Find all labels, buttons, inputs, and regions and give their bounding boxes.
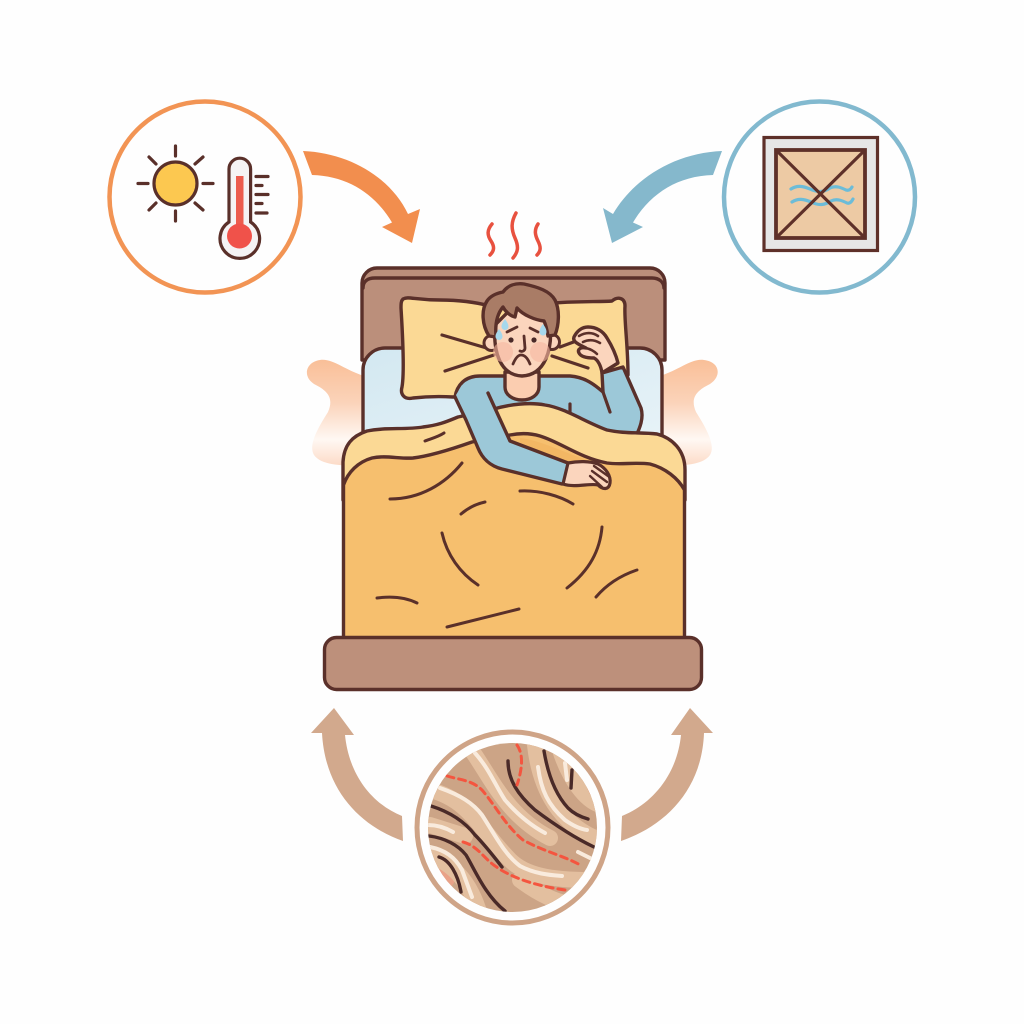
- panel: bed and person: [324, 268, 702, 690]
- arrow: heat to bed: [303, 151, 420, 243]
- person: hair: [483, 284, 558, 337]
- pillow: [401, 298, 628, 398]
- icon: air waves: [791, 186, 853, 205]
- person: face features: [507, 327, 538, 364]
- fabric texture: [424, 740, 600, 915]
- panel: heat and sun: [110, 102, 300, 292]
- icon: thermometer: [220, 158, 268, 258]
- blanket: main duvet: [344, 433, 684, 638]
- icon: sun: [138, 146, 213, 221]
- icon: rising heat squiggles: [488, 213, 540, 258]
- blanket: crease lines: [377, 433, 637, 627]
- icon: right heat waft: [660, 360, 718, 466]
- icon: closed window: [764, 138, 878, 250]
- mattress: [363, 348, 662, 450]
- panel: poor ventilation window: [724, 102, 915, 292]
- person: torso: [455, 367, 642, 445]
- bed base: [324, 638, 702, 690]
- person: raised hand: [574, 327, 618, 373]
- arrow: right from fabric: [621, 708, 713, 841]
- person: neck: [505, 372, 539, 400]
- blanket: top fold: [343, 404, 685, 500]
- illustration: hot sleeper and causes: [107, 99, 918, 926]
- icon: left heat waft: [307, 360, 364, 466]
- person: arm over blanket: [455, 385, 610, 489]
- panel: magnified fabric: [417, 732, 608, 923]
- arrow: ventilation to bed: [603, 151, 722, 243]
- headboard: [362, 268, 665, 360]
- arrow: left from fabric: [311, 708, 403, 841]
- person: sweat drops: [496, 319, 546, 340]
- person: resting hand: [563, 462, 610, 489]
- person: head: [483, 284, 560, 376]
